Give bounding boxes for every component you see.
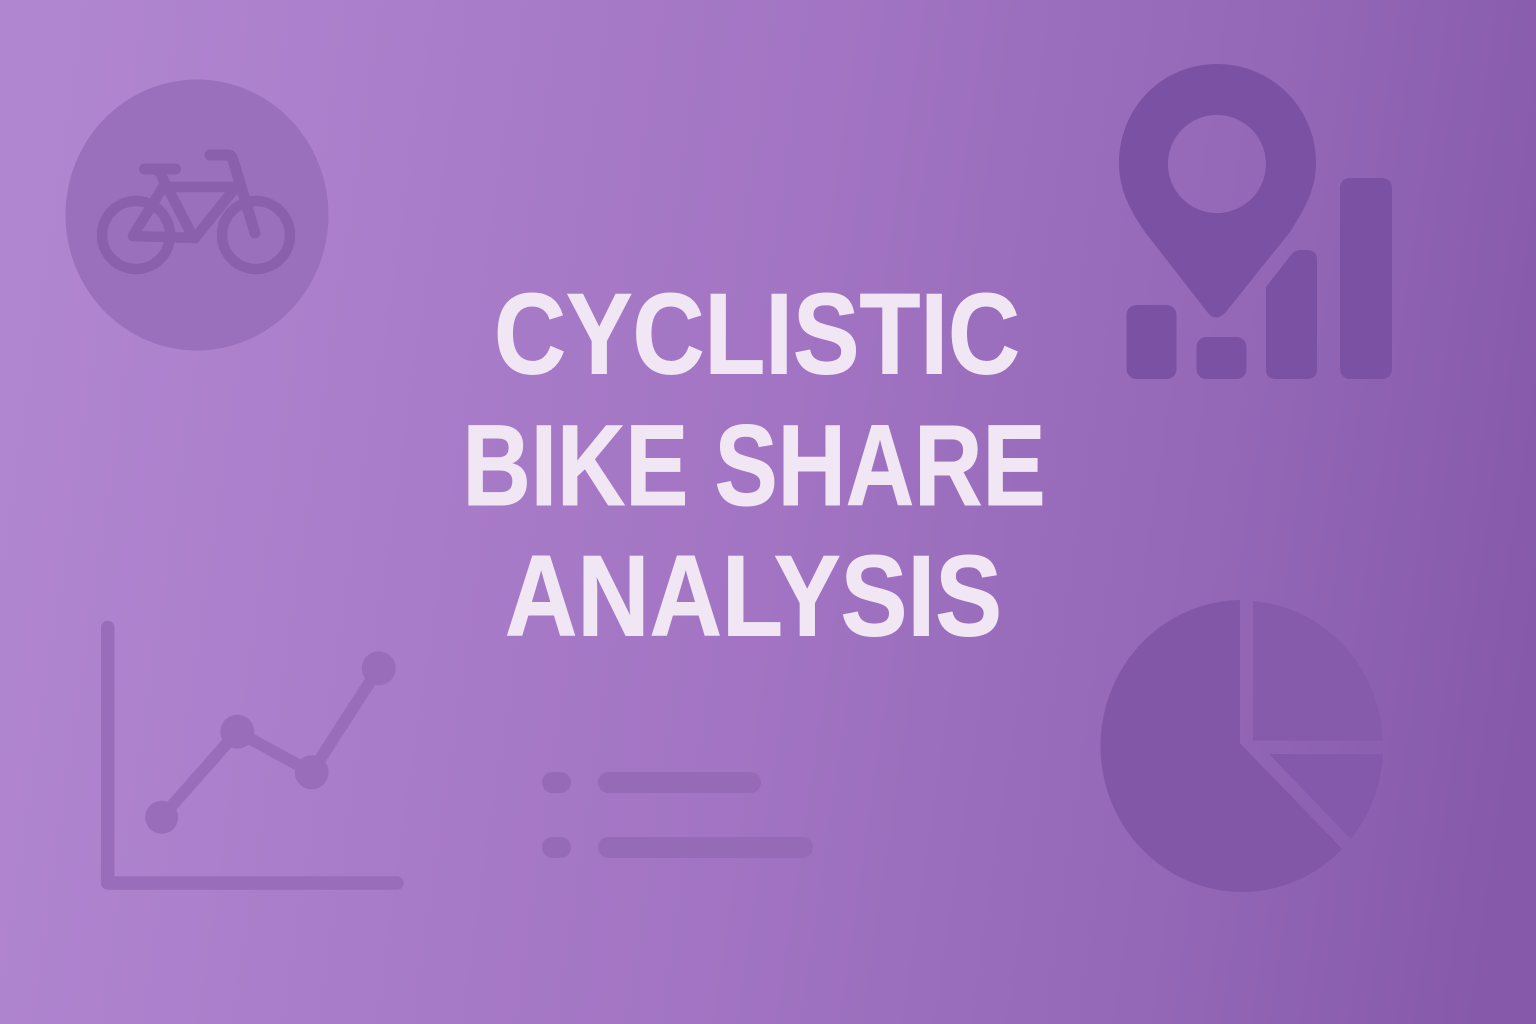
title [462,270,1046,660]
map pin [1119,64,1316,318]
icon: pie chart [1101,600,1383,892]
bar 1 [1126,305,1176,379]
bar 4 [1340,178,1392,379]
bar 3 [1266,250,1317,379]
title: BIKE SHARE [462,402,1046,530]
bar 2 [1196,337,1246,379]
title: CYCLISTIC [494,270,1020,398]
small slice [1269,754,1383,839]
icon: bicycle in circle [66,80,328,350]
icon: list lines [542,772,813,858]
icon: map pin with bars [1119,64,1392,379]
title: ANALYSIS [505,532,1002,660]
large slice [1101,600,1342,892]
top right slice [1253,601,1383,741]
icon: line chart [108,628,397,883]
